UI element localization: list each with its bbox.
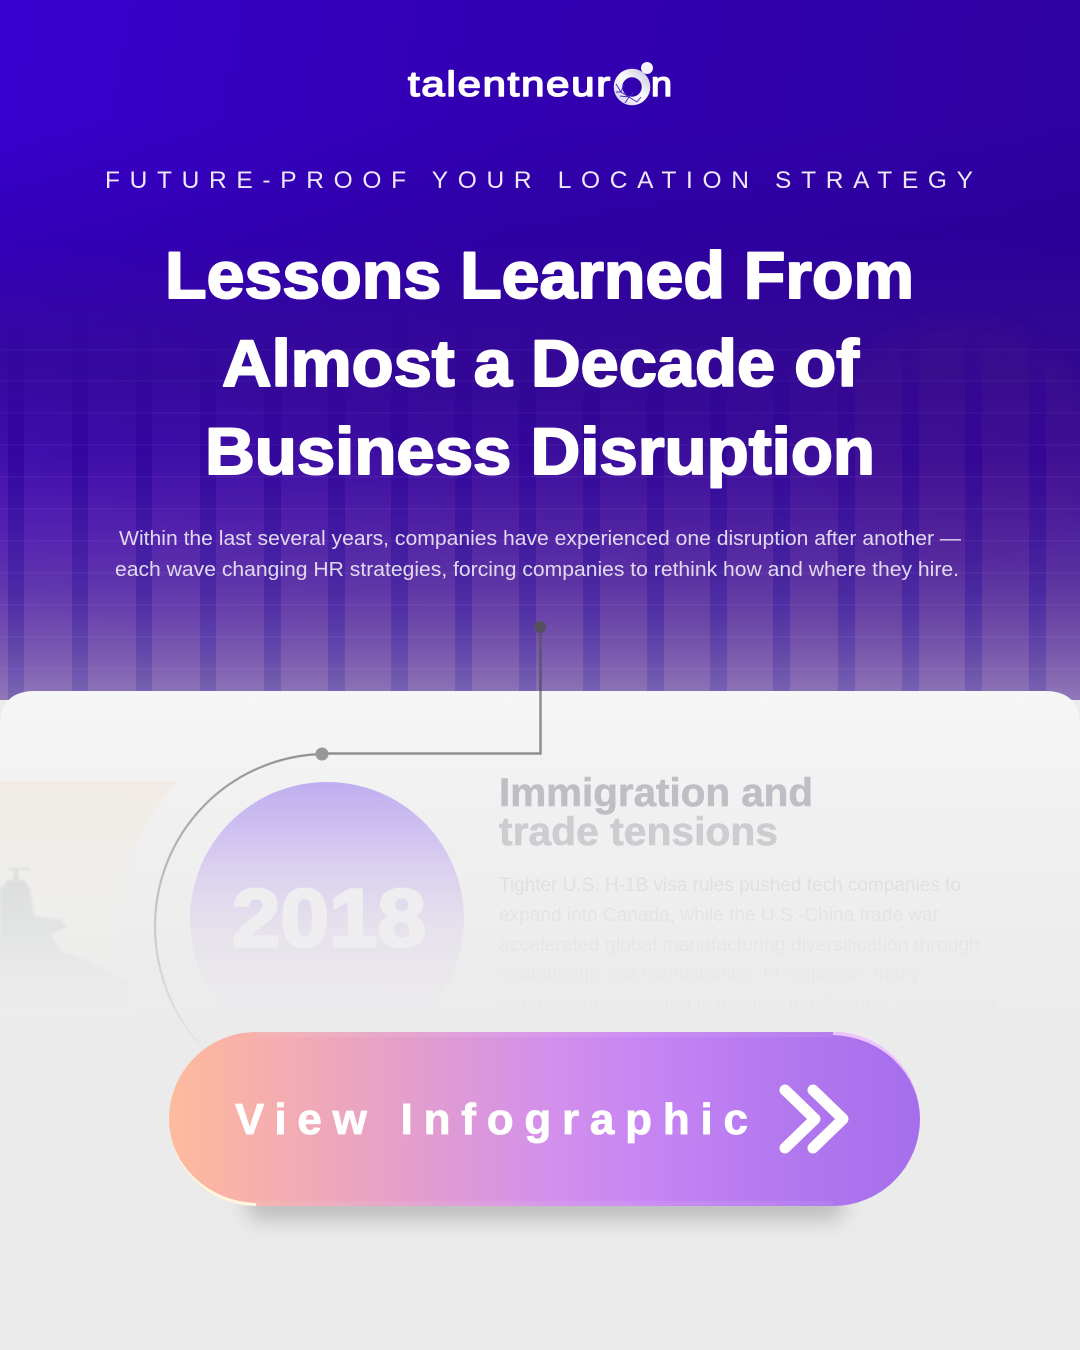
title: Lessons Learned From bbox=[165, 238, 914, 312]
intro paragraph: Within the last several years, companies have experienced one disruption after another — bbox=[119, 528, 961, 550]
intro paragraph: each wave changing HR strategies, forcing companies to rethink how and where they hire. bbox=[115, 559, 959, 581]
icon: 2018 year disc bbox=[190, 782, 464, 1056]
connector line with nodes bbox=[155, 621, 546, 1050]
eyebrow: future-proof your location strategy: FUTURE-PROOF YOUR LOCATION STRATEGY bbox=[105, 167, 973, 194]
logo: talentneuron: n bbox=[651, 65, 672, 104]
button label: View Infographic bbox=[235, 1095, 748, 1144]
title: Business Disruption bbox=[205, 414, 875, 488]
icon: 2018 year disc: 2018 bbox=[232, 873, 426, 964]
body text: fading description bbox=[499, 874, 995, 1015]
title bbox=[165, 238, 914, 488]
panel: timeline card bbox=[0, 621, 1080, 1350]
call to action button: view infographic bbox=[169, 1032, 920, 1220]
heading: immigration and trade tensions: Immigration and bbox=[499, 771, 813, 815]
heading: immigration and trade tensions bbox=[499, 771, 813, 854]
body text: fading description: organizations invested in location intelligence, recognizing bbox=[499, 993, 995, 1015]
image: faded cargo ship photo bbox=[0, 781, 179, 1040]
icon: logo ring with network pattern bbox=[616, 62, 653, 103]
background: purple building facade bbox=[0, 0, 1080, 700]
body text: fading description: nearshoring and friendshoring. In response, many bbox=[499, 963, 920, 985]
heading: immigration and trade tensions: trade tensions bbox=[499, 810, 778, 854]
button shadow bbox=[245, 1190, 845, 1220]
button body bbox=[169, 1032, 920, 1206]
body text: fading description: expand into Canada, while the U.S.-China trade war bbox=[499, 904, 939, 926]
icon: double chevron arrow bbox=[785, 1090, 843, 1148]
button edge highlights bbox=[169, 1032, 920, 1206]
title: Almost a Decade of bbox=[222, 326, 860, 400]
logo: talentneuron bbox=[408, 62, 672, 104]
intro paragraph bbox=[115, 528, 961, 581]
body text: fading description: Tighter U.S. H-1B visa rules pushed tech companies to bbox=[499, 874, 961, 896]
body text: fading description: accelerated global manufacturing diversification through bbox=[499, 934, 980, 956]
logo: talentneuron: talentneur bbox=[408, 65, 612, 104]
